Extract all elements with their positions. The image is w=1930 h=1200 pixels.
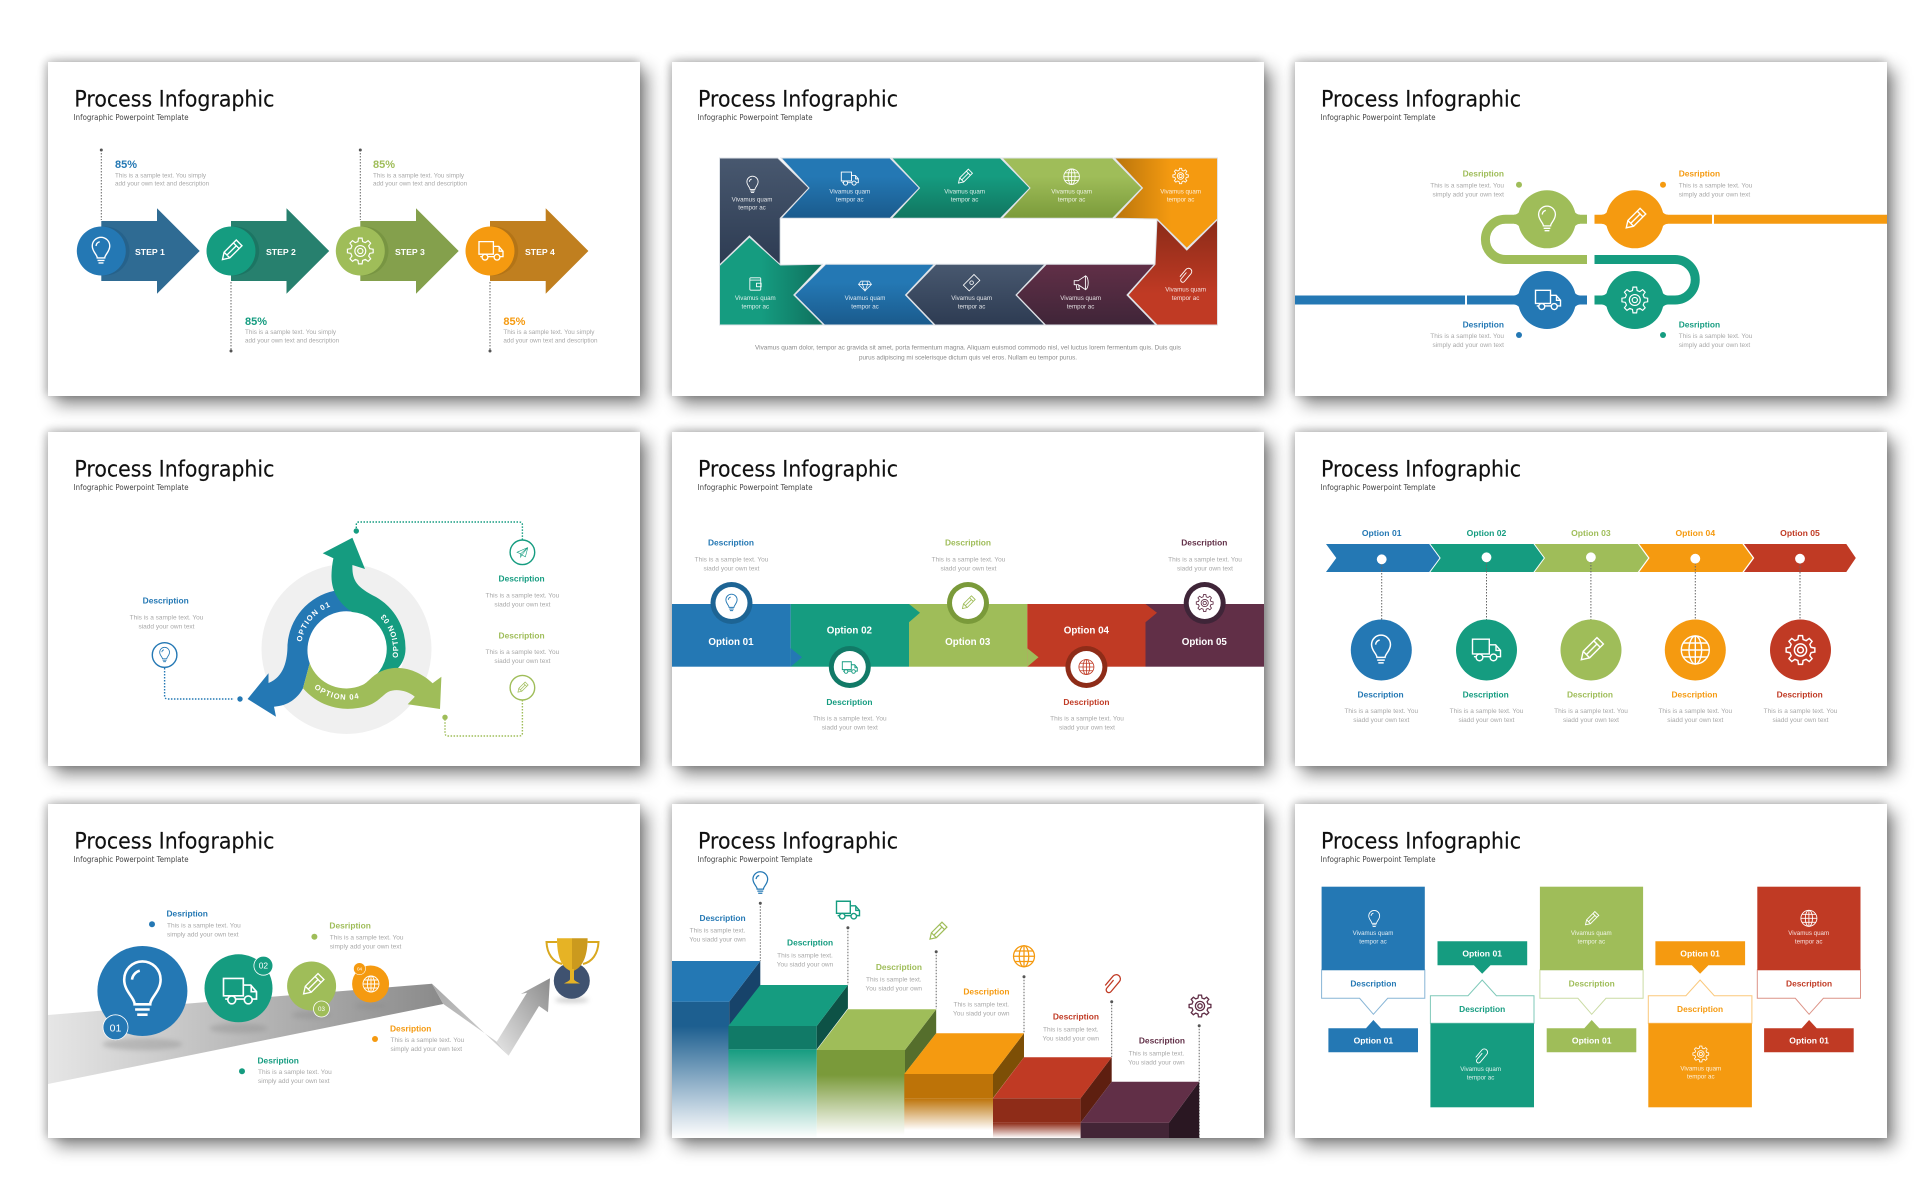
description 2: siadd your own text (822, 725, 878, 732)
panel: circular arrows (48, 432, 640, 766)
option 3 column: This is a sample text. You (1554, 708, 1628, 715)
text block 1: 85% (115, 159, 137, 171)
step 2 arrow (206, 208, 329, 294)
label teal (239, 1055, 332, 1085)
step 02: 02 (259, 961, 268, 971)
rising arrow (432, 978, 550, 1056)
step 1 arrow (77, 208, 200, 294)
title: Process Infographic (74, 88, 274, 113)
text block 1: add your own text and description (115, 181, 210, 188)
ring labels: OPTION 01 (296, 602, 330, 642)
text block 3: 85% (373, 159, 395, 171)
option 2 column: Description (1463, 689, 1509, 699)
step 03 (287, 962, 336, 1017)
title (1321, 458, 1521, 492)
caption (755, 344, 1181, 361)
node 5: Option 05 (1182, 637, 1227, 648)
label orange: This is a sample text. You (1679, 183, 1753, 190)
title (74, 88, 274, 122)
step 04: 04 (357, 966, 362, 971)
node 1: Option 01 (708, 637, 754, 648)
description 1: This is a sample text. You (695, 556, 769, 563)
step text 5: You siadd your own (1043, 1035, 1099, 1042)
card green: Option 01 (1572, 1035, 1612, 1045)
option 3 column: Description (1567, 689, 1613, 699)
node 4: Option 04 (1064, 625, 1110, 636)
step 1 arrow: STEP 1 (135, 247, 165, 257)
option 4 column: siadd your own text (1667, 717, 1723, 724)
chevron labels: tempor ac (738, 205, 766, 212)
chevron labels: tempor ac (742, 303, 769, 310)
chevron labels: Vivamus quam (732, 197, 772, 204)
ring labels: OPTION 03 (381, 614, 398, 658)
option 3 column (1554, 528, 1628, 724)
card blue: Vivamus quam (1353, 930, 1393, 937)
step text 3: You siadd your own (866, 986, 922, 993)
label blue: simply add your own text (167, 931, 239, 938)
step text 6 (1128, 1036, 1185, 1067)
title: Infographic Powerpoint Template (1321, 855, 1436, 864)
step red (993, 1057, 1112, 1138)
label blue: This is a sample text. You (1430, 333, 1504, 340)
label green: This is a sample text. You (330, 934, 404, 941)
panel: chevron timeline (1295, 432, 1887, 766)
label orange: Desription (1679, 169, 1720, 179)
callout blue: Description (143, 595, 189, 605)
connectors (1382, 562, 1800, 620)
panel: winding pipeline (1295, 62, 1887, 396)
option 2 column (1450, 528, 1524, 724)
step text 1: Description (700, 913, 746, 923)
step 03: 03 (318, 1006, 325, 1013)
card blue: Option 01 (1354, 1035, 1393, 1045)
label green: simply add your own text (1432, 192, 1504, 199)
ring labels (296, 602, 398, 700)
description 5: siadd your own text (1177, 565, 1233, 572)
step 01: 01 (110, 1022, 121, 1034)
description 5: Description (1181, 538, 1227, 548)
step 4 arrow (466, 208, 588, 294)
callout blue: siadd your own text (138, 623, 195, 630)
option 4 column: This is a sample text. You (1658, 708, 1733, 715)
card orange: Option 01 (1680, 949, 1720, 959)
description 2: Description (826, 697, 872, 707)
panel: chevron loop (672, 62, 1264, 396)
option 4 column: Option 04 (1675, 528, 1715, 538)
chevron labels: Vivamus quam (829, 188, 870, 195)
chevron labels: tempor ac (951, 197, 978, 204)
callout green: siadd your own text (494, 658, 551, 665)
label green: This is a sample text. You (1430, 183, 1504, 190)
step 3 arrow (336, 208, 459, 294)
option 1 column: Option 01 (1362, 528, 1402, 538)
leader lines (100, 148, 492, 352)
title: Process Infographic (698, 830, 898, 855)
callout teal: Description (499, 574, 545, 584)
step text 1: You siadd your own (689, 937, 746, 944)
node 2: Option 02 (827, 625, 873, 636)
node 3: Option 03 (945, 637, 991, 648)
title: Infographic Powerpoint Template (698, 113, 813, 122)
card green: tempor ac (1578, 938, 1605, 945)
description 4 (1050, 697, 1124, 732)
text block 1 (115, 159, 210, 188)
card orange (1648, 941, 1752, 1107)
leader lines (759, 902, 1201, 1138)
text block 4 (503, 316, 598, 344)
card orange: Description (1677, 1004, 1723, 1014)
caption: Vivamus quam dolor, tempor ac gravida sit amet, porta fermentum magna. Aliquam euismod commodo nisl, vel luctus lorem fermentum quis. Duis quis (755, 344, 1181, 351)
title: Infographic Powerpoint Template (1321, 113, 1436, 122)
card orange: tempor ac (1687, 1074, 1715, 1081)
blue segment (1295, 271, 1587, 329)
trophy (546, 938, 598, 999)
card red: Option 01 (1789, 1035, 1829, 1045)
card teal: Description (1459, 1004, 1505, 1014)
card teal: Vivamus quam (1460, 1066, 1501, 1073)
chevron labels: Vivamus quam (951, 295, 992, 302)
option 1 column (1344, 528, 1419, 724)
step maroon (1081, 1082, 1199, 1138)
chevron labels: tempor ac (1167, 197, 1194, 204)
option 5 column: This is a sample text. You (1764, 708, 1838, 715)
title: Process Infographic (698, 88, 898, 113)
callout blue: This is a sample text. You (130, 614, 204, 621)
teal segment (1594, 260, 1695, 329)
step 3 arrow: STEP 3 (395, 247, 425, 257)
chevron labels: tempor ac (1172, 295, 1199, 302)
label orange: Desription (390, 1023, 431, 1033)
card teal: tempor ac (1467, 1074, 1494, 1081)
chevron icons (747, 168, 1193, 291)
card teal: Option 01 (1462, 949, 1502, 959)
panel: callout cards (1295, 804, 1887, 1138)
step text 2: This is sample text. (777, 952, 833, 959)
step orange (904, 1033, 1024, 1138)
chevron labels (732, 188, 1206, 310)
label blue (149, 909, 241, 938)
title: Process Infographic (1321, 458, 1521, 483)
step text 2: You siadd your own (777, 961, 834, 968)
label green: Desription (1463, 169, 1504, 179)
title (74, 830, 274, 864)
option 5 column: siadd your own text (1772, 717, 1829, 724)
step 04 (352, 963, 389, 1002)
node 1 (708, 582, 754, 648)
ring labels: OPTION 04 (315, 684, 359, 700)
title: Process Infographic (74, 830, 274, 855)
step text 1: This is sample text. (690, 928, 746, 935)
title: Infographic Powerpoint Template (74, 483, 189, 492)
card green: Description (1569, 979, 1615, 989)
option 2 column: Option 02 (1467, 528, 1507, 538)
caption: purus adipiscing mi scelerisque dictum quis vel eros. Nullam eu tempor purus. (859, 354, 1077, 361)
panel: road to trophy (48, 804, 640, 1138)
label orange (1660, 169, 1753, 199)
step text 5: This is sample text. (1043, 1026, 1099, 1033)
step text 4: This is sample text. (953, 1002, 1009, 1009)
title: Process Infographic (1321, 88, 1521, 113)
step text 3 (866, 962, 922, 993)
step text 2: Description (787, 938, 833, 948)
label green (311, 921, 404, 950)
title (74, 458, 274, 492)
title: Infographic Powerpoint Template (1321, 483, 1436, 492)
description 1: Description (708, 538, 754, 548)
step teal (728, 985, 848, 1138)
step blue (672, 961, 760, 1138)
step text 5 (1043, 1011, 1099, 1042)
card orange: Vivamus quam (1680, 1065, 1721, 1072)
option 2 column: siadd your own text (1458, 717, 1515, 724)
description 3: Description (945, 538, 991, 548)
title: Process Infographic (698, 458, 898, 483)
step text 4: You siadd your own (953, 1011, 1010, 1018)
description 4: This is a sample text. You (1050, 716, 1124, 723)
card blue: tempor ac (1359, 938, 1387, 945)
label blue: simply add your own text (1432, 342, 1504, 349)
option 2 column: This is a sample text. You (1450, 708, 1524, 715)
arrow: option 04 (303, 663, 441, 709)
step text 3: Description (876, 962, 922, 972)
title (1321, 88, 1521, 122)
option 4 column (1658, 528, 1733, 724)
text block 2 (245, 316, 340, 344)
chevron labels: tempor ac (1058, 197, 1085, 204)
node 2 (827, 625, 873, 688)
step green (817, 1009, 936, 1138)
timeline chevrons (1326, 544, 1856, 572)
title: Infographic Powerpoint Template (698, 855, 813, 864)
text block 2: add your own text and description (245, 337, 340, 344)
title: Infographic Powerpoint Template (74, 855, 189, 864)
label blue (1430, 319, 1522, 349)
description 3 (932, 538, 1006, 572)
callout teal: siadd your own text (494, 602, 551, 609)
card red: Description (1786, 979, 1832, 989)
description 3: This is a sample text. You (932, 556, 1006, 563)
callout teal (354, 522, 560, 609)
title: Process Infographic (1321, 830, 1521, 855)
colour band (672, 604, 1264, 667)
text block 4: add your own text and description (503, 337, 598, 344)
label orange: simply add your own text (1679, 192, 1750, 199)
chevron labels: tempor ac (851, 303, 879, 310)
step text 3: This is sample text. (866, 977, 922, 984)
text block 1: This is a sample text. You simply (115, 172, 207, 179)
option 5 column: Option 05 (1780, 528, 1820, 538)
orange segment (1594, 190, 1887, 248)
label green (1430, 169, 1522, 199)
label teal: simply add your own text (258, 1078, 330, 1085)
grey ring (275, 578, 418, 720)
card red: Vivamus quam (1788, 930, 1829, 937)
card teal (1430, 941, 1534, 1107)
card green (1540, 887, 1643, 1052)
label teal: simply add your own text (1679, 342, 1750, 349)
chevron labels: Vivamus quam (845, 295, 885, 302)
panel: option band (672, 432, 1264, 766)
chevron labels: tempor ac (958, 303, 985, 310)
description 2 (813, 697, 887, 732)
chevron labels: Vivamus quam (1160, 188, 1201, 195)
label orange: simply add your own text (390, 1046, 462, 1053)
panel: staircase (672, 804, 1264, 1138)
node 4 (1064, 625, 1110, 688)
label teal: This is a sample text. You (1679, 333, 1753, 340)
title (698, 830, 898, 864)
label teal: Desription (258, 1055, 299, 1065)
text block 3: This is a sample text. You simply (373, 172, 465, 179)
step icons (753, 872, 1211, 1017)
description 1 (695, 538, 769, 572)
node 5 (1182, 582, 1227, 648)
callout blue (130, 595, 243, 702)
step text 2 (777, 938, 834, 968)
chevron labels: Vivamus quam (944, 188, 985, 195)
road (48, 984, 443, 1084)
option 4 column: Description (1671, 689, 1718, 699)
label blue: This is a sample text. You (167, 922, 241, 929)
label blue: Desription (1463, 319, 1504, 329)
text block 4: 85% (503, 316, 526, 328)
chevron loop shapes (720, 158, 1218, 325)
label teal: This is a sample text. You (258, 1069, 332, 1076)
label green: simply add your own text (330, 943, 402, 950)
description 4: siadd your own text (1059, 725, 1115, 732)
option 1 column: This is a sample text. You (1344, 708, 1419, 715)
chevron labels: tempor ac (836, 197, 864, 204)
circle shadows (102, 997, 589, 1050)
callout green (442, 630, 560, 736)
label green: Desription (329, 921, 371, 931)
title: Process Infographic (74, 458, 274, 483)
option 3 column: Option 03 (1571, 528, 1611, 538)
chevron labels: Vivamus quam (735, 295, 776, 302)
option 1 column: Description (1358, 689, 1404, 699)
card blue (1322, 887, 1425, 1052)
label orange (372, 1023, 465, 1053)
card red: tempor ac (1795, 938, 1822, 945)
label blue: Desription (166, 909, 208, 919)
callout green: This is a sample text. You (486, 649, 560, 656)
title: Infographic Powerpoint Template (74, 113, 189, 122)
chevron labels: Vivamus quam (1051, 188, 1092, 195)
step text 5: Description (1053, 1011, 1099, 1021)
title (1321, 830, 1521, 864)
step text 6: Description (1139, 1036, 1185, 1046)
chevron labels: Vivamus quam (1165, 287, 1206, 294)
callout green: Description (499, 630, 545, 640)
step text 4 (953, 987, 1010, 1018)
step text 6: You siadd your own (1128, 1060, 1185, 1067)
option 3 column: siadd your own text (1563, 717, 1619, 724)
option 5 column: Description (1777, 689, 1823, 699)
text block 3: add your own text and description (373, 181, 468, 188)
step text 1 (689, 913, 746, 944)
card red (1757, 887, 1860, 1052)
text block 3 (373, 159, 468, 188)
description 5 (1168, 538, 1242, 572)
callout teal: This is a sample text. You (486, 593, 560, 600)
arrow: option 03 (323, 538, 406, 677)
description 3: siadd your own text (940, 565, 997, 572)
step 02 (204, 954, 273, 1022)
step 2 arrow: STEP 2 (266, 247, 296, 257)
node 3 (945, 582, 991, 648)
card blue: Description (1350, 979, 1396, 989)
card green: Vivamus quam (1571, 930, 1612, 937)
timeline dots (1377, 552, 1805, 564)
step text 6: This is sample text. (1129, 1051, 1184, 1058)
text block 4: This is a sample text. You simply (503, 329, 595, 336)
description 4: Description (1063, 697, 1109, 707)
title (698, 88, 898, 122)
label orange: This is a sample text. You (390, 1037, 465, 1044)
description 2: This is a sample text. You (813, 716, 887, 723)
text block 2: 85% (245, 316, 267, 328)
chevron labels: Vivamus quam (1060, 295, 1101, 302)
panel: step arrows (48, 62, 640, 396)
label teal: Desription (1679, 319, 1720, 329)
green segment (1485, 190, 1587, 260)
title (698, 458, 898, 492)
option 1 column: siadd your own text (1353, 717, 1409, 724)
description 1: siadd your own text (703, 565, 760, 572)
label teal (1660, 319, 1753, 349)
arrow: option 01 (248, 591, 354, 717)
text block 2: This is a sample text. You simply (245, 329, 337, 336)
step 01 (97, 946, 187, 1040)
step 4 arrow: STEP 4 (525, 247, 555, 257)
title: Infographic Powerpoint Template (698, 483, 813, 492)
step text 4: Description (963, 987, 1009, 997)
description 5: This is a sample text. You (1168, 556, 1242, 563)
chevron labels: tempor ac (1067, 303, 1094, 310)
option 5 column (1764, 528, 1838, 724)
